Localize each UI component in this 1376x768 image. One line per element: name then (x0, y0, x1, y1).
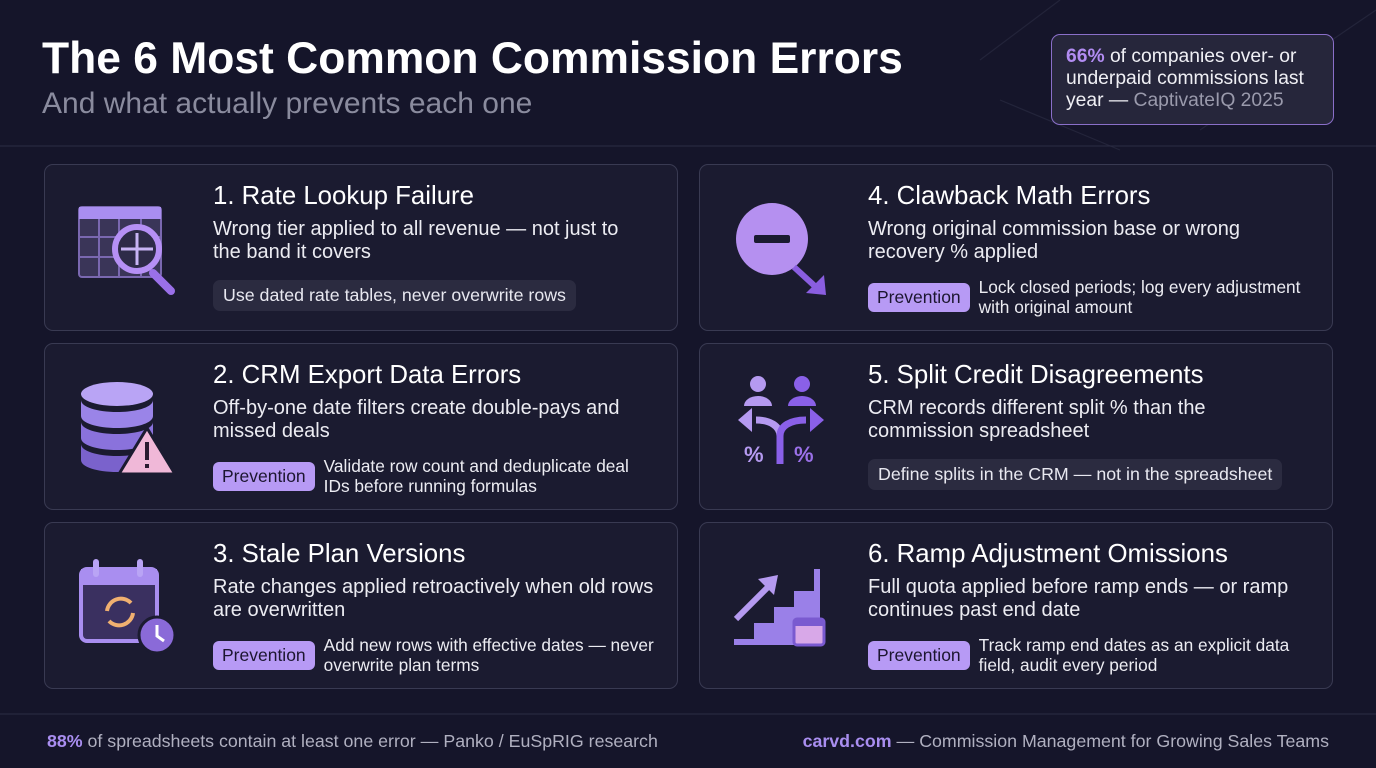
icon: minus circle arrow (736, 203, 826, 295)
panel: 5: Define splits in the CRM — not in the spreadsheet (878, 464, 1272, 484)
title: The 6 Most Common Commission Errors (42, 34, 903, 83)
panel: 3: Add new rows with effective dates — never overwrite plan terms (324, 635, 654, 675)
panel: 3: Rate changes applied retroactively when old rows are overwritten (213, 576, 653, 621)
icon: split people: % (794, 442, 814, 467)
panel: 2: Validate row count and deduplicate deal IDs before running formulas (324, 456, 629, 496)
panel: 6: Prevention (877, 644, 961, 664)
panel: 2: 2. CRM Export Data Errors (213, 361, 521, 389)
icon: calendar clock (79, 559, 174, 652)
panel: 4: 4. Clawback Math Errors (868, 182, 1150, 210)
panel: 1: 1. Rate Lookup Failure (213, 182, 474, 210)
panel: 1: Wrong tier applied to all revenue — not just to the band it covers (213, 218, 618, 263)
panel: 5 (699, 343, 1333, 510)
panel: 4 (699, 164, 1333, 331)
panel: 6 (699, 522, 1333, 689)
icon: split people (738, 376, 824, 467)
callout: stat: 66% of companies over- or underpaid commissions last year — CaptivateIQ 2025 (1066, 46, 1304, 111)
panel: 4: Prevention (877, 286, 961, 306)
panel: 4: Lock closed periods; log every adjustment with original amount (979, 277, 1300, 317)
panel: 1: Use dated rate tables, never overwrite rows (223, 285, 566, 305)
icon: database warning (81, 382, 172, 472)
panel: 3 (44, 522, 678, 689)
icon: split people: % (744, 442, 764, 467)
subtitle: And what actually prevents each one (42, 87, 532, 120)
callout: stat (1051, 34, 1334, 125)
footer: left stat: 88% of spreadsheets contain at least one error — Panko / EuSpRIG research (47, 731, 658, 751)
footer: brand: carvd.com — Commission Management for Growing Sales Teams (803, 731, 1329, 751)
panel: 6: Full quota applied before ramp ends — or ramp continues past end date (868, 576, 1288, 621)
panel: 4: Wrong original commission base or wrong recovery % applied (868, 218, 1240, 263)
panel: 2 (44, 343, 678, 510)
panel: 6: Track ramp end dates as an explicit data field, audit every period (979, 635, 1289, 675)
panel: 2: Prevention (222, 466, 306, 486)
panel: 3: Prevention (222, 644, 306, 664)
panel: 5: CRM records different split % than the commission spreadsheet (868, 397, 1206, 442)
icon: table magnifier (78, 206, 175, 295)
panel: 2: Off-by-one date filters create double-pays and missed deals (213, 397, 620, 442)
icon: stairs ramp (734, 569, 826, 646)
panel: 1 (44, 164, 678, 331)
panel: 5: 5. Split Credit Disagreements (868, 361, 1204, 389)
panel: 6: 6. Ramp Adjustment Omissions (868, 540, 1228, 568)
panel: 3: 3. Stale Plan Versions (213, 540, 465, 568)
